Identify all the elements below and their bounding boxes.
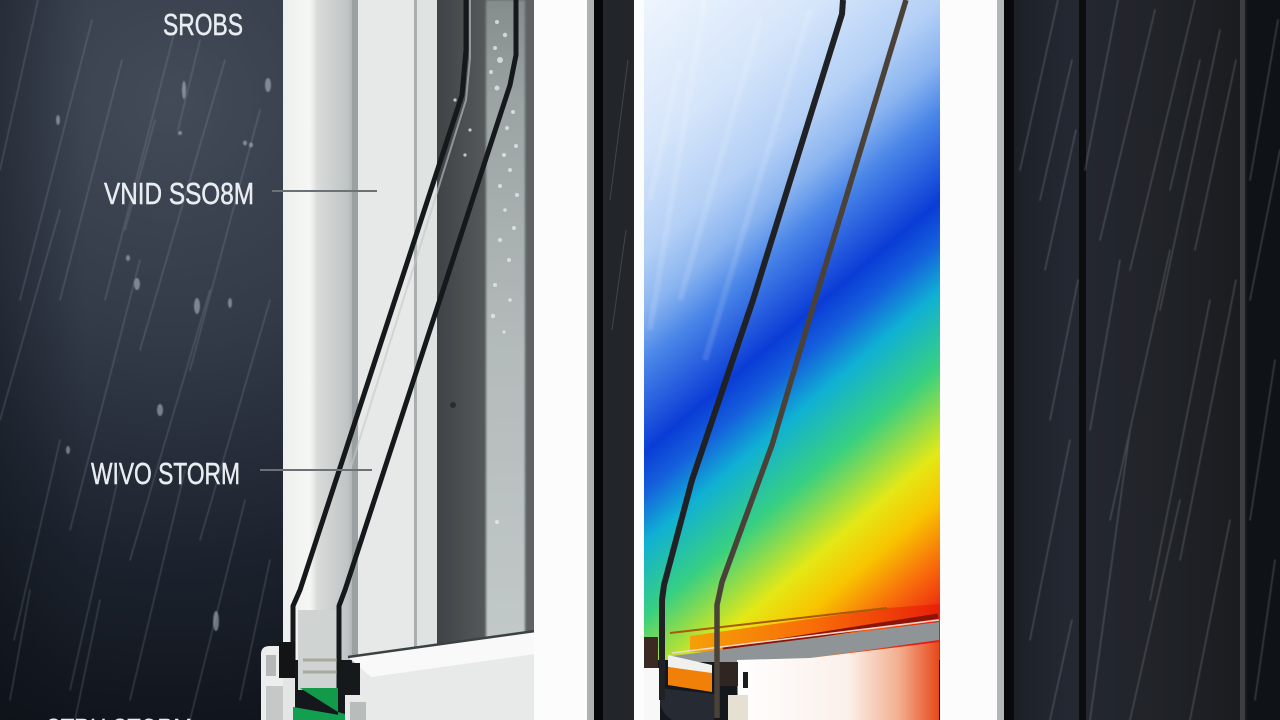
vertical seam 1 <box>1079 0 1086 720</box>
glazing cavity stripes <box>303 660 337 672</box>
thermal pane line 2 <box>717 0 906 718</box>
outer sill clip <box>261 646 283 720</box>
sill shadow line <box>348 631 535 657</box>
vertical seam 2 <box>1240 0 1245 720</box>
glass pane line 2 <box>339 0 516 700</box>
thermal gradient <box>644 0 940 660</box>
light streaks over thermal gradient <box>650 0 810 360</box>
dark glass pane <box>437 0 535 680</box>
lower chamber <box>350 702 366 720</box>
inner glazing light area <box>352 0 438 680</box>
grey sill top <box>672 622 939 662</box>
black gasket left <box>279 642 295 678</box>
white lower left <box>644 668 660 720</box>
label: wind storm lower: WIVO STORM <box>91 456 240 491</box>
dark base <box>660 688 714 720</box>
sill body <box>737 642 939 720</box>
lower chamber <box>728 695 748 720</box>
glass pane line 1 <box>293 0 466 700</box>
label: wind storm upper: VNID SSO8M <box>104 176 254 211</box>
rain streaks: right <box>1020 0 1280 720</box>
panel: dark divider <box>587 0 634 720</box>
orange chamber <box>668 667 712 692</box>
panel: dark exterior right <box>997 0 1280 720</box>
outer frame profile <box>283 0 358 660</box>
white sill lip <box>668 655 712 674</box>
leader line upper <box>272 190 377 192</box>
frame: middle white jamb <box>534 0 588 720</box>
sill body <box>345 650 535 720</box>
rain streaks: left <box>0 0 270 720</box>
glass cavity above sill <box>298 610 340 690</box>
dark droplet <box>450 402 456 408</box>
dark gasket right <box>720 662 738 686</box>
deep red sill shadow <box>723 616 938 650</box>
frame lower left <box>283 660 295 720</box>
pale sill edge <box>672 620 939 653</box>
rain drops: left <box>56 78 271 631</box>
wet glass strip <box>486 0 525 680</box>
label: top: SROBS <box>163 7 243 42</box>
thermal pane line 1 <box>662 0 843 700</box>
panel: window cross-section, thermal side <box>634 0 940 720</box>
condensation droplets <box>453 20 519 524</box>
panel: window cross-section, storm side <box>283 0 535 700</box>
sill top surface <box>348 632 535 677</box>
panel: sill profile, storm side <box>261 631 535 720</box>
black gasket right <box>341 663 360 695</box>
green spacer <box>293 688 345 720</box>
orange band <box>690 604 940 652</box>
leader line lower <box>260 469 372 471</box>
frame: right white jamb <box>940 0 997 720</box>
panel: storm background <box>0 0 284 720</box>
dark gasket left <box>644 637 658 668</box>
rear glass highlight <box>350 0 470 470</box>
dark thin line <box>670 608 887 633</box>
left white edge <box>634 0 645 720</box>
